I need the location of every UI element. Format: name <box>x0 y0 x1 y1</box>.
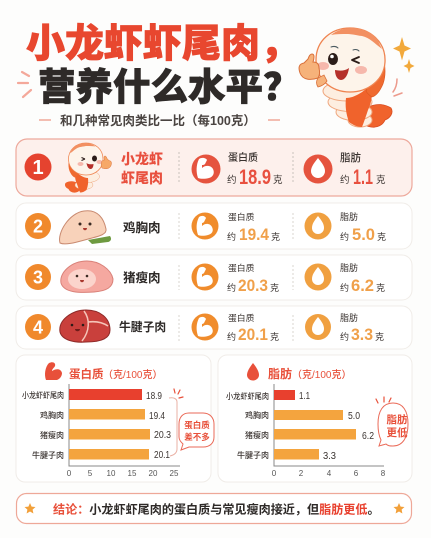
bar chart: fat: 鸡胸肉 <box>245 410 269 420</box>
bar chart: protein: 18.9 <box>146 391 162 402</box>
bar chart: fat: 4 <box>327 469 332 478</box>
protein value: 蛋白质 <box>228 312 255 323</box>
protein value: 约 <box>227 331 236 342</box>
protein value: 19.4 <box>239 225 269 244</box>
fat value <box>340 211 386 244</box>
bar chart: protein: 0 <box>67 469 72 478</box>
rank badge 2: 2 <box>33 216 43 236</box>
bar chart: protein: 25 <box>170 469 179 478</box>
bar chart: fat: 0 <box>272 469 277 478</box>
fat value: 脂肪 <box>340 312 358 323</box>
protein value: 蛋白质 <box>228 211 255 222</box>
protein value: 克 <box>270 283 279 293</box>
fat value: 5.0 <box>352 225 375 244</box>
icon: fat drop <box>304 212 332 240</box>
icon: muscle <box>45 362 62 380</box>
protein value: 20.1 <box>238 325 268 344</box>
title <box>26 23 300 108</box>
panel: conclusion <box>16 494 412 524</box>
fat value <box>340 312 384 344</box>
protein value: 约 <box>227 174 237 186</box>
chart heading <box>268 366 351 381</box>
fat value: 克 <box>377 232 386 242</box>
label: 小龙虾 <box>121 151 163 167</box>
fat value: 脂肪 <box>340 151 361 164</box>
label <box>121 151 163 186</box>
conclusion text: 结论：小龙虾虾尾肉的蛋白质与常见瘦肉接近，但脂肪更低。 <box>53 502 380 516</box>
icon: protein muscle <box>192 264 218 290</box>
icon: fat drop <box>304 154 332 184</box>
panel: row 2 chicken <box>16 203 412 249</box>
panel: fat chart <box>218 355 412 482</box>
bar chart: protein: 10 <box>107 469 116 478</box>
fat value: 克 <box>376 283 385 293</box>
bar chart: protein: 鸡胸肉 <box>40 410 64 420</box>
icon: drop <box>247 363 259 381</box>
icon: beef <box>60 310 110 342</box>
protein value <box>227 211 280 244</box>
bar chart: fat <box>226 384 386 478</box>
icon: fat drop <box>305 314 331 340</box>
fat value: 6.2 <box>351 276 374 295</box>
icon: pork <box>61 261 113 292</box>
panel: protein chart <box>16 355 214 482</box>
bar chart: protein: 猪瘦肉 <box>40 430 64 440</box>
fat value <box>340 262 385 295</box>
chart heading: 蛋白质 <box>69 367 104 381</box>
chart heading <box>69 367 162 381</box>
bar chart: protein: 19.4 <box>149 411 165 422</box>
rank badge 1: 1 <box>32 157 44 179</box>
icon: protein muscle <box>192 212 218 240</box>
icon: protein muscle <box>192 154 220 184</box>
fat value: 1.1 <box>353 166 373 189</box>
decoration: title burst lines <box>18 72 31 97</box>
panel: row 1 shrimp <box>16 139 412 196</box>
fat value: 脂肪 <box>340 262 358 273</box>
panel: row 4 beef <box>16 306 412 349</box>
bar chart: protein: 5 <box>88 469 93 478</box>
bar chart: fat: 2 <box>299 469 304 478</box>
label: 鸡胸肉 <box>123 220 161 235</box>
callout: protein similar: 蛋白质 <box>184 420 210 430</box>
label: 牛腱子肉 <box>119 320 166 334</box>
chart heading: （克/100克） <box>292 368 351 381</box>
bar chart: fat: 8 <box>381 469 386 478</box>
icon: star left <box>24 503 36 514</box>
bar chart: protein: 小龙虾虾尾肉 <box>22 390 64 400</box>
bar chart: fat: 1.1 <box>299 391 310 402</box>
fat value: 脂肪 <box>340 211 358 222</box>
protein value: 克 <box>273 175 283 186</box>
label: 虾尾肉 <box>121 170 163 186</box>
bar chart: fat: 5.0 <box>348 411 360 422</box>
protein value: 蛋白质 <box>228 151 258 164</box>
rank badge 4 <box>25 314 51 340</box>
rank badge 4: 4 <box>33 318 43 338</box>
bar chart: fat: 6 <box>354 469 359 478</box>
bar chart: protein <box>22 384 180 478</box>
protein value: 18.9 <box>239 166 271 189</box>
fat value: 克 <box>376 175 386 186</box>
icon: sparkles <box>393 37 414 73</box>
fat value: 约 <box>340 231 349 242</box>
decoration: motion lines <box>393 79 402 96</box>
subtitle: 和几种常见肉类比一比（每100克） <box>60 113 256 128</box>
callout: protein similar <box>169 389 214 456</box>
callout: fat lower: 脂肪 <box>386 413 408 426</box>
rank badge 3: 3 <box>33 268 43 288</box>
bar chart: fat: 牛腱子肉 <box>237 450 269 460</box>
protein value: 克 <box>270 332 279 342</box>
label: 猪瘦肉 <box>123 270 161 285</box>
protein value <box>227 151 283 189</box>
bar chart: fat: 6.2 <box>362 431 374 442</box>
protein value <box>227 312 279 344</box>
protein value: 20.3 <box>238 276 268 295</box>
fat value <box>340 151 386 189</box>
bar chart: fat: 小龙虾虾尾肉 <box>226 391 269 401</box>
bar chart: fat: 3.3 <box>323 451 336 462</box>
icon: star right <box>394 503 404 514</box>
fat value: 约 <box>340 282 349 293</box>
bar chart: protein: 15 <box>128 469 137 478</box>
fat value: 约 <box>340 174 350 186</box>
chart heading: 脂肪 <box>268 366 292 381</box>
protein value: 克 <box>271 232 280 242</box>
icon: chicken breast <box>60 211 111 244</box>
rank badge 1 <box>24 154 52 180</box>
bar chart: protein: 20.1 <box>154 450 170 461</box>
fat value: 3.3 <box>351 325 373 344</box>
title: 营养什么水平？ <box>38 66 300 108</box>
rank badge 3 <box>25 264 51 290</box>
panel: row 3 pork <box>16 255 412 300</box>
callout: protein similar: 差不多 <box>184 432 210 442</box>
bar chart: protein: 牛腱子肉 <box>32 450 64 460</box>
protein value <box>227 262 279 295</box>
icon: fat drop <box>304 264 332 290</box>
fat value: 约 <box>340 331 349 342</box>
fat value: 克 <box>375 332 384 342</box>
chart heading: （克/100克） <box>103 368 162 381</box>
bar chart: protein: 20.3 <box>154 430 171 441</box>
icon: small shrimp <box>65 143 111 193</box>
bar chart: protein: 20 <box>149 469 158 478</box>
protein value: 约 <box>227 282 236 293</box>
bar chart: fat: 猪瘦肉 <box>245 430 269 440</box>
icon: protein muscle <box>192 314 218 340</box>
protein value: 约 <box>227 231 236 242</box>
title: 小龙虾虾尾肉， <box>26 23 299 66</box>
callout: fat lower: 更低 <box>386 426 408 439</box>
protein value: 蛋白质 <box>228 262 255 273</box>
callout: fat lower <box>376 397 408 446</box>
icon: shrimp mascot <box>299 28 392 127</box>
rank badge 2 <box>25 213 51 239</box>
